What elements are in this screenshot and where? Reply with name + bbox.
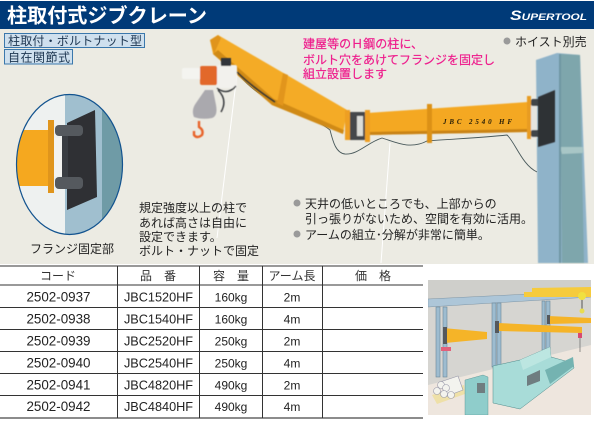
title: 柱取付式ジブクレーン [7,4,207,28]
arm mid flange [427,104,432,143]
table rows: 2502-0941 [26,378,91,392]
model label on arm: JBC 2540 HF [442,118,512,126]
logo: Supertool: SUPERTOOL [510,7,587,23]
table rows [26,290,300,414]
table rows: JBC2540HF [124,356,193,370]
table rows: 250kg [215,356,247,370]
tag: mounting type: 柱取付・ボルトナット型 [8,34,142,48]
text block: features: 引っ張りがないため、空間を有効に活用。 [305,211,533,226]
callout: installation note [303,37,495,81]
columns [436,301,550,377]
table header: 容 量 [213,269,249,283]
table rows: 4m [284,356,300,370]
callout: installation note: ボルト穴をあけてフランジを固定し [303,53,495,67]
lathe machine [493,347,574,409]
table rows: 250kg [215,334,247,348]
arm joint [349,112,365,140]
table rows: JBC1540HF [124,312,193,326]
table rows: 2502-0939 [26,334,91,348]
text block: features [294,197,533,242]
end flange [527,96,531,139]
control cabinet [465,375,488,415]
steel column [536,53,588,263]
oval frame [16,94,122,234]
title banner [0,1,594,29]
white hoist ropes [217,66,390,263]
text block: column strength: 規定強度以上の柱で [139,200,247,215]
table rows: 160kg [215,312,247,326]
table rows: JBC4820HF [124,378,193,392]
hook [194,121,203,137]
table rows: 490kg [215,400,247,414]
text block: column strength: 設定できます。 [139,230,222,244]
panel: product photo background [0,29,594,264]
table header: 品 番 [140,269,176,283]
table rows: 2m [284,290,300,304]
text block: column strength: あれば高さは自由に [139,216,247,230]
hoists [441,347,451,351]
table rows: 2502-0940 [26,356,91,370]
caption: flange: フランジ固定部 [30,242,114,256]
table rows: JBC4840HF [124,400,193,414]
note: hoist sold separately: ホイスト別売 [515,34,587,49]
callout: installation note: 建屋等のＨ鋼の柱に、 [303,37,423,51]
illustration: factory with jib cranes [428,280,591,415]
electric chain hoist [182,58,275,137]
text block: features: 天井の低いところでも、上部からの [305,197,497,211]
callout: installation note: 組立設置します [303,67,387,81]
table header: コード [40,269,76,283]
text block: column strength: ボルト・ナットで固定 [139,244,259,258]
chain bag [193,90,216,119]
table header: アーム長 [268,269,316,283]
table header [40,268,391,283]
table rows: 2m [284,378,300,392]
table rows: 4m [284,312,300,326]
table rows: 2502-0942 [26,399,91,414]
inner arm section [367,102,528,135]
table rows: 4m [284,400,300,414]
power cable [240,76,537,172]
detail photo: flange mount [16,94,124,236]
text block: column strength [139,200,259,258]
ceiling beam [428,294,591,308]
overhead crane [532,287,591,297]
table rows: JBC2520HF [124,334,193,348]
specification table [0,266,423,418]
pipes on pallet [432,385,465,404]
table rows: 490kg [215,378,247,392]
text block: features: アームの組立･分解が非常に簡単。 [305,227,490,242]
tag: articulated type: 自在関節式 [8,50,70,64]
table header: 価 格 [355,268,391,283]
table rows: 160kg [215,290,247,304]
column plate [538,90,555,147]
jib crane arm [210,35,555,147]
table rows: 2m [284,334,300,348]
table rows: 2502-0938 [26,312,91,326]
table rows: 2502-0937 [26,290,91,304]
table rows: JBC1520HF [124,290,193,304]
jib arms [443,316,591,343]
outer arm section [210,35,347,134]
